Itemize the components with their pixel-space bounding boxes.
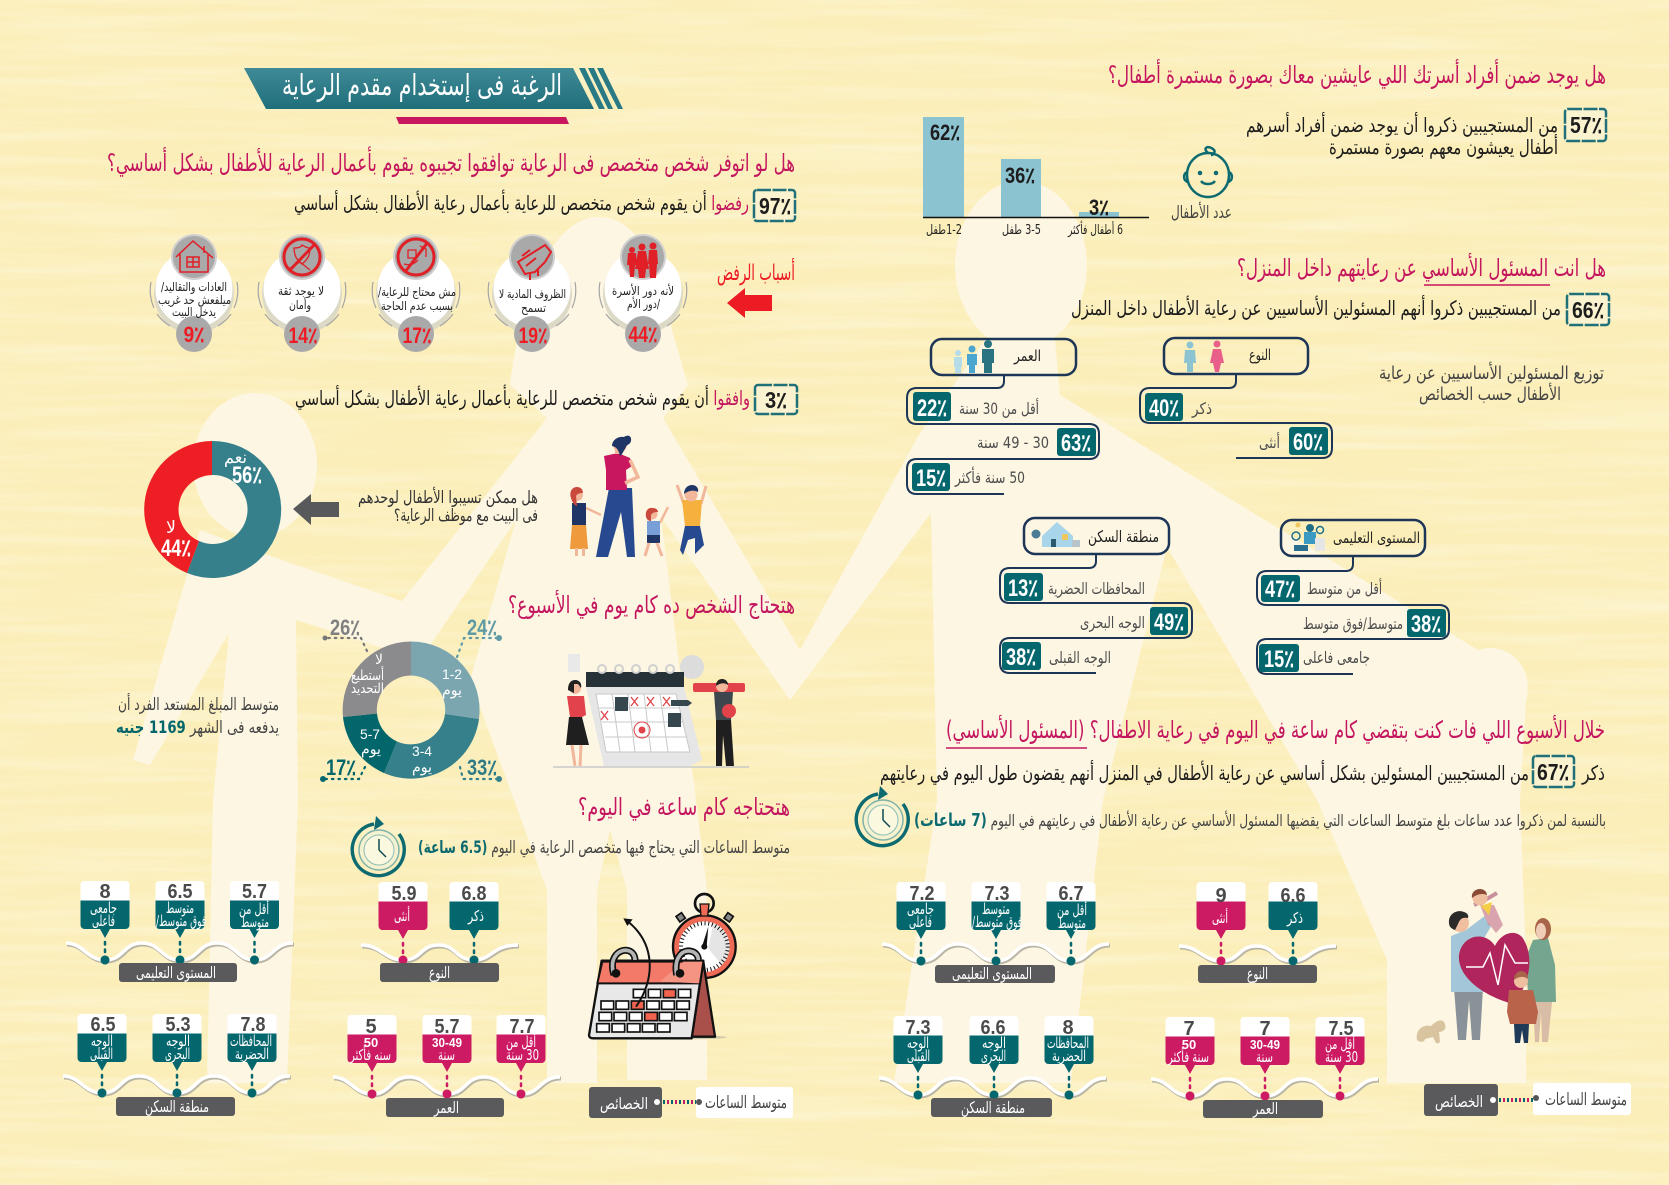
donut chart: days per week: 3-4 xyxy=(412,743,432,759)
donut chart: days per week: التحديد xyxy=(351,681,384,697)
panel: caregiver by age: أقل من 30 سنة xyxy=(959,398,1039,419)
panel: left hours by education: المستوى التعليمى xyxy=(136,963,216,983)
question text: leave kids alone xyxy=(358,487,538,526)
reason: customs 9 percent: ميلفعش حد غريب xyxy=(158,293,231,308)
panel: right hours by age: سنة xyxy=(1256,1048,1273,1066)
reason: not needed 17 percent: بسبب عدم الحاجة xyxy=(381,299,453,313)
icon: clock xyxy=(856,786,908,846)
panel: right hours by gender xyxy=(1179,882,1337,984)
legend: right characteristics to hours xyxy=(1424,1083,1631,1116)
panel: caregiver by gender: أنثى xyxy=(1259,432,1280,452)
panel: left hours by gender: 5.9 xyxy=(392,883,416,905)
panel: right hours by housing: البحرى xyxy=(981,1047,1006,1065)
panel: right hours by education: المستوى التعليمى xyxy=(952,964,1032,984)
panel: left hours by gender: ذكر xyxy=(467,907,484,925)
panel: right hours by housing: المحافظات xyxy=(1047,1034,1089,1052)
panel: left hours by gender: النوع xyxy=(429,963,450,983)
illustration: calendar and two people xyxy=(553,654,749,767)
donut chart: days per week: 1-2 xyxy=(442,666,462,682)
stat: 57 percent xyxy=(1246,109,1606,159)
panel: right hours by housing: 6.6 xyxy=(980,1017,1006,1039)
text: average monthly amount: يدفعه فى الشهر 1169 جنيه xyxy=(116,718,279,738)
donut chart: leave kids alone: لا xyxy=(166,518,176,538)
panel: left hours by age: سنه فأكثر xyxy=(349,1044,391,1064)
icon: baby face xyxy=(1184,147,1232,197)
reason: finances 19 percent xyxy=(488,234,576,352)
panel: left hours by housing: 5.3 xyxy=(166,1014,190,1036)
panel: right hours by education: جامعى xyxy=(907,900,934,918)
reason: not needed 17 percent xyxy=(372,234,460,352)
donut chart: days per week: يوم xyxy=(442,681,462,699)
bar chart: number of children: 1-2طفل xyxy=(926,223,962,238)
panel: left hours by housing: القبلى xyxy=(90,1045,113,1063)
panel: caregiver by education: 38٪ xyxy=(1411,611,1441,638)
bar chart: number of children: 6 أطفال فأكثر xyxy=(1067,220,1123,238)
panel: left hours by age: 7.7 xyxy=(510,1016,534,1038)
donut chart: days per week: 5-7 xyxy=(360,726,380,742)
panel: right hours by housing xyxy=(879,1016,1107,1118)
panel: left hours by age: 30-49 xyxy=(432,1035,462,1050)
panel: right hours by education: 7.3 xyxy=(984,883,1010,905)
panel: right hours by housing: القبلى xyxy=(907,1047,930,1065)
panel: caregiver by education: متوسط/فوق متوسط xyxy=(1303,614,1403,634)
panel: left hours by gender: أنثى xyxy=(394,906,410,925)
panel: caregiver by housing: الوجه البحرى xyxy=(1080,613,1145,633)
data label: 17 percent: 17٪ xyxy=(326,755,356,780)
panel: caregiver by housing: 38٪ xyxy=(1006,644,1036,671)
title accent bar xyxy=(396,117,569,124)
panel: caregiver by age: 63٪ xyxy=(1061,430,1091,457)
reason: finances 19 percent: الظروف المادية لا xyxy=(499,287,566,302)
panel: caregiver by education: أقل من متوسط xyxy=(1307,578,1382,599)
stat: 97 percent refused: 97٪ xyxy=(759,193,791,219)
panel: right hours by age: 30-49 xyxy=(1250,1037,1280,1052)
label: number of children: عدد الأطفال xyxy=(1171,202,1232,223)
panel: caregiver by education: جامعى فاعلى xyxy=(1303,648,1370,667)
panel: caregiver by education xyxy=(1257,520,1449,674)
title banner xyxy=(244,68,623,109)
panel: left hours by education: 5.7 xyxy=(242,881,267,903)
stat: 3 percent agreed: 3٪ xyxy=(765,387,787,413)
bar chart: number of children: 3-5 طفل xyxy=(1002,223,1041,238)
donut chart: days per week: أستطيع xyxy=(351,666,384,684)
legend: left characteristics to hours xyxy=(589,1087,793,1118)
panel: right hours by education: فوق متوسط/ xyxy=(972,913,1022,931)
donut chart: days per week: يوم xyxy=(412,758,432,776)
arrow: grey xyxy=(293,494,339,525)
legend: right characteristics to hours: الخصائص xyxy=(1435,1092,1483,1112)
data label: 24 percent: 24٪ xyxy=(467,615,497,640)
panel: left hours by education xyxy=(66,881,294,983)
donut chart: days per week: يوم xyxy=(361,740,381,758)
illustration: calendar and stopwatch xyxy=(589,894,736,1039)
panel: left hours by education: أقل من xyxy=(239,899,269,918)
legend: right characteristics to hours: متوسط الساعات xyxy=(1545,1090,1627,1110)
panel: left hours by age: العمر xyxy=(433,1098,459,1118)
label: reasons for refusal: أسباب الرفض xyxy=(717,258,795,286)
panel: caregiver by gender: ذكر xyxy=(1191,399,1212,419)
panel: right hours by gender: 9 xyxy=(1215,885,1227,907)
bar chart: number of children: 36٪ xyxy=(1005,163,1035,188)
panel: caregiver by education: 15٪ xyxy=(1264,646,1294,673)
panel: left hours by age: سنة xyxy=(438,1046,455,1064)
panel: right hours by education: أقل من xyxy=(1057,900,1087,919)
panel: left hours by education: متوسط xyxy=(166,899,194,917)
panel: right hours by age: 50 xyxy=(1182,1037,1196,1052)
panel: caregiver by age: 22٪ xyxy=(917,395,947,422)
panel: caregiver by age xyxy=(907,339,1099,494)
panel: left hours by age: أقل من xyxy=(506,1032,536,1051)
panel: left hours by education: فاعلى xyxy=(92,912,115,930)
panel: left hours by education: متوسط xyxy=(241,913,269,931)
panel: caregiver by housing xyxy=(1000,518,1192,673)
panel: right hours by gender: ذكر xyxy=(1286,909,1303,927)
panel: right hours by housing: الوجه xyxy=(907,1034,929,1052)
panel: left hours by education: 8 xyxy=(99,881,111,903)
panel: caregiver by housing: منطقة السكن xyxy=(1088,527,1159,547)
panel: caregiver by education: المستوى التعليمى xyxy=(1333,529,1420,547)
panel: left hours by education: جامعى xyxy=(90,899,117,917)
heading: question 1: هل لو اتوفر شخص متخصص فى الرعاية توافقوا تجيبوه يقوم بأعمال الرعاية للأطفال بشكل أساسي؟ xyxy=(107,146,795,177)
panel: right hours by gender: النوع xyxy=(1247,964,1268,984)
reason: family role 44 percent xyxy=(599,234,687,352)
family silhouette background xyxy=(133,181,1528,1083)
reason: no trust 14 percent xyxy=(258,234,346,352)
panel: caregiver by housing: 13٪ xyxy=(1008,575,1038,602)
panel: caregiver by age: 15٪ xyxy=(916,465,946,492)
panel: caregiver by housing: 49٪ xyxy=(1154,609,1184,636)
reason: customs 9 percent: يدخل البيت xyxy=(172,305,216,319)
panel: caregiver by age: 50 سنة فأكثر xyxy=(954,466,1025,488)
panel: left hours by housing: منطقة السكن xyxy=(145,1097,209,1117)
illustration: family holding heart xyxy=(1417,889,1556,1043)
panel: right hours by age: 7.5 xyxy=(1328,1018,1354,1040)
reason: not needed 17 percent: مش محتاج للرعاية/ xyxy=(378,285,456,300)
legend: left characteristics to hours: الخصائص xyxy=(600,1094,648,1114)
panel: left hours by education: 6.5 xyxy=(168,881,192,903)
reason: customs 9 percent xyxy=(150,234,238,352)
panel: caregiver by education: 47٪ xyxy=(1265,576,1295,603)
panel: left hours by education: فوق متوسط/ xyxy=(156,912,206,930)
panel: left hours by housing: الحضرية xyxy=(235,1045,269,1063)
donut chart: leave kids alone: 56٪ xyxy=(232,462,262,489)
stat: 57 percent: أطفال يعيشون معهم بصورة مستمرة xyxy=(1329,134,1558,159)
donut chart: days per week: لا xyxy=(375,652,383,668)
panel: caregiver by housing: المحافظات الحضرية xyxy=(1048,579,1145,599)
panel: right hours by education: فاعلى xyxy=(909,913,932,931)
panel: left hours by housing: المحافظات xyxy=(230,1032,272,1050)
reason: finances 19 percent: 19٪ xyxy=(518,323,548,348)
icon: clock xyxy=(352,816,404,876)
reason: not needed 17 percent: 17٪ xyxy=(402,323,432,348)
data label: 26 percent xyxy=(322,615,367,651)
panel: caregiver by gender: 60٪ xyxy=(1293,429,1323,456)
reason: customs 9 percent: العادات والتقاليد/ xyxy=(161,280,227,295)
panel: caregiver by age: العمر xyxy=(1013,347,1041,365)
text: average monthly amount: متوسط المبلغ المستعد الفرد أن xyxy=(118,693,279,715)
panel: right hours by age: العمر xyxy=(1252,1099,1278,1119)
reason: family role 44 percent: 44٪ xyxy=(628,322,658,347)
stat: 57 percent: 57٪ xyxy=(1570,112,1602,138)
panel: left hours by housing: البحرى xyxy=(165,1045,190,1063)
data label: 33 percent: 33٪ xyxy=(467,755,497,780)
donut chart: leave kids alone: 44٪ xyxy=(161,535,191,562)
reason: no trust 14 percent: وأمان xyxy=(289,297,311,313)
panel: left hours by housing xyxy=(63,1014,291,1117)
stat: 97 percent refused: رفضوا أن يقوم شخص متخصص للرعاية بأعمال رعاية الأطفال بشكل أساسي xyxy=(294,189,749,216)
text: distribution note: الأطفال حسب الخصائص xyxy=(1419,383,1561,405)
panel: left hours by housing: الوجه xyxy=(91,1032,113,1050)
panel: left hours by housing: 7.8 xyxy=(240,1014,266,1036)
panel: right hours by housing: منطقة السكن xyxy=(961,1098,1025,1118)
panel: right hours by age: 7 xyxy=(1259,1018,1271,1040)
reason: no trust 14 percent: لا يوجد ثقة xyxy=(278,284,324,299)
panel: right hours by age: 30 سنة xyxy=(1325,1048,1358,1066)
heading: days per week: هتحتاج الشخص ده كام يوم في الأسبوع؟ xyxy=(508,590,795,619)
panel: right hours by education: 7.2 xyxy=(910,883,934,905)
stat: 97 percent refused xyxy=(294,189,795,221)
panel: caregiver by gender: النوع xyxy=(1249,346,1271,364)
panel: right hours by gender: 6.6 xyxy=(1280,885,1306,907)
panel: right hours by age xyxy=(1151,1017,1379,1119)
panel: right hours by education: 6.7 xyxy=(1058,883,1084,905)
arrow: red xyxy=(727,288,772,318)
panel: left hours by housing: الوجه xyxy=(166,1032,190,1050)
reason: customs 9 percent: 9٪ xyxy=(184,322,205,347)
title banner: الرغبة فى إستخدام مقدم الرعاية xyxy=(282,68,562,103)
panel: right hours by housing: الوجه xyxy=(982,1034,1006,1052)
data label: 26 percent: 26٪ xyxy=(330,615,360,640)
stat: 67 percent: 67٪ xyxy=(1537,759,1569,785)
bar chart: number of children: 62٪ xyxy=(930,120,960,145)
reason: finances 19 percent: تسمح xyxy=(521,301,546,315)
panel: left hours by age: 30 سنة xyxy=(506,1046,539,1064)
bar chart: number of children xyxy=(923,117,1149,238)
panel: caregiver by gender: 40٪ xyxy=(1149,395,1179,422)
panel: right hours by age: سنة فأكثر xyxy=(1167,1046,1209,1066)
panel: right hours by education xyxy=(882,882,1110,984)
panel: caregiver by age: 30 - 49 سنة xyxy=(977,433,1049,452)
panel: right hours by housing: 7.3 xyxy=(906,1017,930,1039)
heading: hours per day: هتحتاجه كام ساعة في اليوم؟ xyxy=(578,793,790,821)
text: distribution note xyxy=(1379,362,1604,405)
donut chart: days per week xyxy=(343,641,480,779)
panel: left hours by age: 5.7 xyxy=(434,1016,460,1038)
illustration: mother and children xyxy=(570,436,706,557)
panel: right hours by age: 7 xyxy=(1183,1018,1195,1040)
stat: 66 percent: 66٪ xyxy=(1572,297,1604,323)
panel: right hours by gender: أنثى xyxy=(1212,908,1228,927)
stat: 57 percent: من المستجيبين ذكروا أن يوجد ضمن أفراد أسرهم xyxy=(1246,112,1558,137)
reason: family role 44 percent: لأنه دور الأسرة xyxy=(612,283,674,299)
data label: 24 percent xyxy=(457,615,502,657)
question text: leave kids alone: فى البيت مع موظف الرعاية؟ xyxy=(394,506,538,526)
panel: caregiver by gender xyxy=(1140,338,1332,458)
panel: right hours by age: أقل من xyxy=(1325,1034,1355,1053)
reason: no trust 14 percent: 14٪ xyxy=(288,323,318,348)
text: average hours needed: متوسط الساعات التي يحتاج فيها متخصص الرعاية في اليوم (6.5 ساعة) xyxy=(418,838,790,858)
panel: caregiver by housing: الوجه القبلى xyxy=(1049,648,1111,668)
panel: left hours by age: 50 xyxy=(364,1035,378,1050)
panel: left hours by age xyxy=(333,1015,561,1118)
bar chart: number of children: 3٪ xyxy=(1089,195,1109,220)
text: average monthly amount xyxy=(116,693,279,738)
text: distribution note: توزيع المسئولين الأساسيين عن رعاية xyxy=(1379,362,1604,384)
donut chart: leave kids alone xyxy=(144,441,281,578)
panel: left hours by housing: 6.5 xyxy=(90,1014,116,1036)
question text: leave kids alone: هل ممكن تسيبوا الأطفال لوحدهم xyxy=(358,487,538,508)
stat: 3 percent agreed: وافقوا أن يقوم شخص متخصص للرعاية بأعمال رعاية الأطفال بشكل أساسي xyxy=(295,384,750,411)
stat: 67 percent: ذكر xyxy=(1581,761,1605,785)
panel: left hours by gender xyxy=(361,882,519,983)
donut chart: leave kids alone: نعم xyxy=(224,448,247,468)
panel: right hours by housing: 8 xyxy=(1062,1017,1074,1039)
panel: right hours by education: متوسط xyxy=(1058,914,1086,932)
panel: left hours by age: 5 xyxy=(365,1016,377,1038)
reason: family role 44 percent: /دور الأم xyxy=(627,296,661,312)
panel: right hours by housing: الحضرية xyxy=(1052,1047,1086,1065)
legend: left characteristics to hours: متوسط الساعات xyxy=(705,1093,787,1113)
panel: right hours by education: متوسط xyxy=(982,900,1010,918)
panel: left hours by gender: 6.8 xyxy=(462,883,486,905)
